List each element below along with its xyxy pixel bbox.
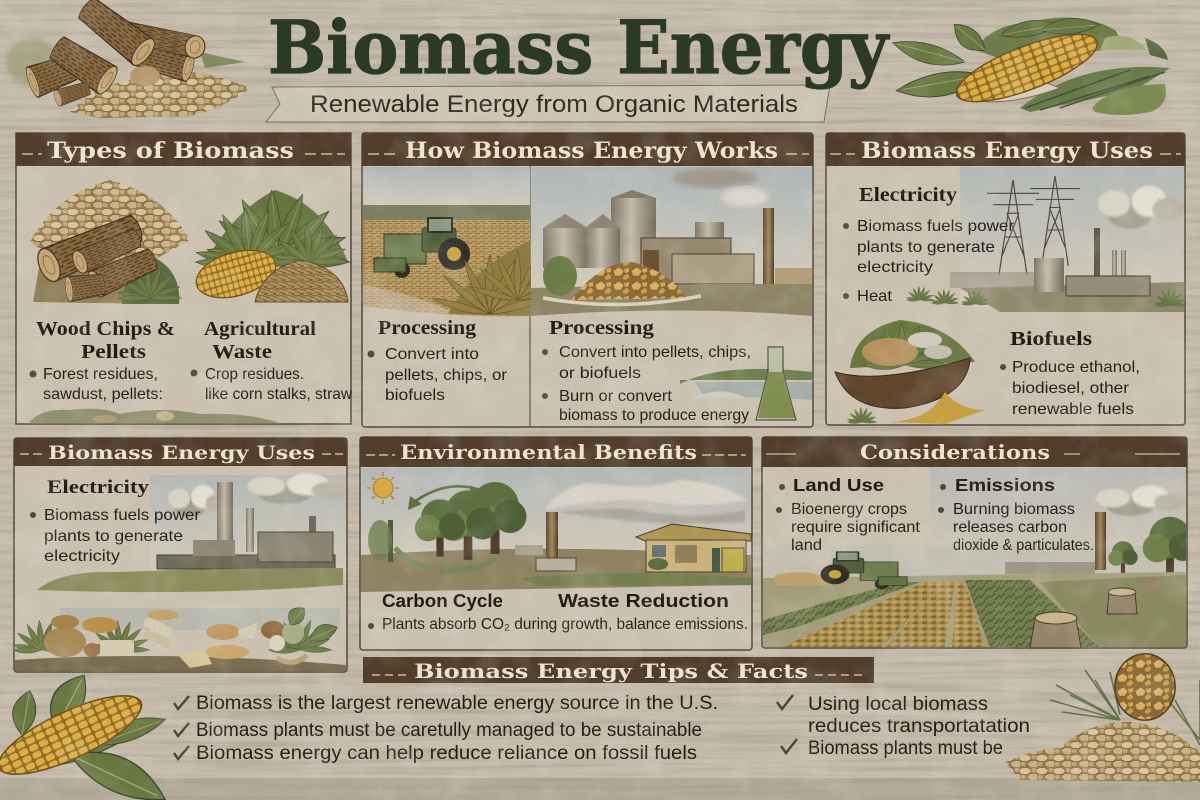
- panel: biomass energy uses lower: [12, 438, 350, 672]
- heading: biomass energy uses: Biomass Energy Uses: [48, 442, 315, 464]
- sub-heading: biofuels: Biofuels: [1010, 329, 1092, 350]
- sub-heading: wood chips and pellets: Wood Chips &: [36, 319, 175, 340]
- sub-heading: processing: Processing: [378, 318, 476, 339]
- icon: trees: [368, 482, 526, 562]
- panel: how biomass energy works: [362, 133, 813, 427]
- title: Biomass Energy: [268, 5, 890, 91]
- icon: tree stump small: [1107, 580, 1159, 614]
- bullet text: convert into pellets: [368, 346, 508, 404]
- bullet text: electricity: Biomass fuels power: [857, 218, 1015, 235]
- arrow: carbon cycle bottom: [395, 548, 495, 570]
- bullet text: heat: [843, 288, 893, 305]
- sub-heading: agricultural waste: Waste: [212, 342, 272, 363]
- heading banner: tips and facts: Biomass Energy Tips & Facts: [414, 660, 808, 683]
- ground foliage strip: [28, 409, 282, 424]
- bullet text: biofuels: [1000, 359, 1140, 418]
- bullet text: forest residues: sawdust, pellets:: [43, 386, 163, 403]
- icon: biofuel flask: [756, 347, 796, 420]
- bullet text: carbon absorption: Plants absorb CO₂ during growth, balance emissions.: [382, 616, 748, 633]
- illustration: island landscape: [680, 369, 812, 400]
- bullet text: crop residues: [190, 366, 352, 403]
- sub-heading: wood chips and pellets: [36, 319, 175, 363]
- illustration: corn and leaves top right: [890, 16, 1170, 115]
- heading: environmental benefits: Environmental Benefits: [400, 441, 697, 464]
- bullet text: crop residues: Crop residues.: [205, 366, 304, 383]
- illustration: fields, tractor, chimney and trees: [763, 468, 1197, 648]
- sub-heading: agricultural waste: Agricultural: [204, 319, 317, 340]
- heading: considerations: [762, 437, 1187, 467]
- bullet text: electricity: plants to generate: [44, 528, 183, 545]
- bullet text: electricity: electricity: [44, 548, 120, 565]
- bullet text: electricity: Biomass fuels power: [44, 507, 201, 524]
- sub-heading: land use: Land Use: [793, 475, 884, 495]
- tips list left: Biomass is the largest renewable energy source in the U.S.: [196, 693, 718, 714]
- bullet text: electricity: [843, 218, 1015, 276]
- illustration: logs and pellets top left: [6, 0, 250, 118]
- illustration: vegetable and biomass strip: [12, 602, 346, 672]
- bullet text: convert into pellets: pellets, chips, or: [385, 367, 508, 384]
- bullet text: land use: Bioenergy crops: [791, 501, 907, 518]
- bullet text: biofuels: Produce ethanol,: [1012, 359, 1140, 376]
- bullet text: convert and burn: Burn or convert: [559, 388, 673, 405]
- panel: considerations: [762, 437, 1197, 648]
- subtitle banner: Renewable Energy from Organic Materials: [310, 91, 798, 118]
- bullet text: convert and burn: or biofuels: [559, 365, 641, 382]
- icon: chimney: [515, 512, 576, 571]
- bullet text: forest residues: Forest residues,: [43, 366, 158, 383]
- bullet text: forest residues: [30, 366, 163, 403]
- bullet text: electricity: plants to generate: [857, 239, 995, 256]
- panel: types of biomass: [16, 133, 352, 424]
- bullet text: convert and burn: [542, 344, 751, 424]
- subtitle banner: [266, 85, 830, 122]
- bullet text: convert and burn: biomass to produce energy: [559, 407, 749, 424]
- tips list right: reduces transportatation: [808, 716, 1030, 737]
- bullet text: emissions: [938, 484, 1094, 554]
- heading: biomass energy uses: Biomass Energy Uses: [861, 138, 1153, 164]
- bullet text: land use: [776, 484, 921, 554]
- tips list left: [174, 693, 718, 764]
- bullet text: crop residues: like corn stalks, straw: [205, 386, 352, 403]
- heading: types of biomass: Types of Biomass: [47, 138, 294, 164]
- icon: basket of biofuel feedstock: [835, 320, 985, 424]
- panel: environmental benefits: [360, 437, 752, 650]
- bullet text: land use: require significant: [791, 519, 921, 536]
- sub-heading: agricultural waste: [204, 319, 317, 363]
- sub-heading: processing: Processing: [549, 318, 654, 339]
- sub-heading: electricity: Electricity: [859, 185, 957, 206]
- tips list left: Biomass plants must be caretully managed to be sustainable: [196, 720, 702, 741]
- panel: biomass energy uses top: [826, 133, 1186, 425]
- bullet text: emissions: Burning biomass: [953, 501, 1075, 518]
- illustration: biomass power plant: [37, 473, 350, 592]
- icon: pine cone and needles: [1050, 653, 1200, 745]
- sub-heading: emissions: Emissions: [955, 475, 1055, 495]
- heading: environmental benefits: [360, 437, 752, 467]
- heading: biomass energy uses: [14, 438, 347, 466]
- bullet text: biofuels: renewable fuels: [1012, 401, 1134, 418]
- bullet text: land use: land: [791, 537, 822, 554]
- icon: wood pellets pile and logs: [30, 180, 190, 304]
- heading: biomass energy uses: [826, 133, 1185, 166]
- illustration: tractor in field: [363, 167, 567, 318]
- tips list right: Biomass plants must be: [808, 738, 1003, 759]
- bullet text: convert and burn: Convert into pellets, chips,: [559, 344, 751, 361]
- heading: types of biomass: [16, 133, 351, 166]
- illustration: processing plant with silos: [531, 167, 812, 316]
- illustration: sky, pylons and power plant: [906, 167, 1186, 312]
- bullet text: electricity: electricity: [857, 259, 933, 276]
- sub-heading: electricity: Electricity: [47, 478, 150, 498]
- tips list right: Using local biomass: [808, 694, 988, 715]
- icon: corn cob bottom left: [0, 667, 174, 800]
- tips list left: Biomass energy can help reduce reliance on fossil fuels: [196, 743, 697, 764]
- icon: sun: [367, 472, 399, 504]
- heading: considerations: Considerations: [860, 441, 1050, 464]
- icon: pellet pile bottom right: [1005, 722, 1200, 782]
- arrow: carbon cycle top: [408, 485, 483, 510]
- icon: tractor: [821, 552, 907, 589]
- illustration: carbon cycle landscape: [361, 468, 751, 592]
- sub-heading: carbon cycle: Carbon Cycle: [382, 591, 503, 611]
- heading: how biomass energy works: How Biomass Energy Works: [405, 138, 778, 164]
- icon: waste facility house: [636, 524, 751, 572]
- tips list right: [777, 694, 1030, 759]
- bullet text: convert into pellets: Convert into: [385, 346, 479, 363]
- heading: how biomass energy works: [362, 133, 813, 166]
- bullet text: emissions: releases carbon: [953, 519, 1067, 536]
- bullet text: convert into pellets: biofuels: [385, 387, 445, 404]
- sub-heading: waste reduction: Waste Reduction: [558, 591, 729, 611]
- sub-heading: wood chips and pellets: Pellets: [81, 342, 146, 363]
- icon: tree stump large: [1030, 612, 1081, 648]
- bullet text: electricity: [30, 507, 201, 565]
- icon: corn plant, cob and straw: [191, 190, 350, 306]
- heading banner: tips and facts: [363, 657, 874, 683]
- bullet text: heat: Heat: [857, 288, 893, 305]
- bullet text: emissions: dioxide & particulates.: [953, 537, 1094, 554]
- bullet text: biofuels: biodiesel, other: [1012, 380, 1130, 397]
